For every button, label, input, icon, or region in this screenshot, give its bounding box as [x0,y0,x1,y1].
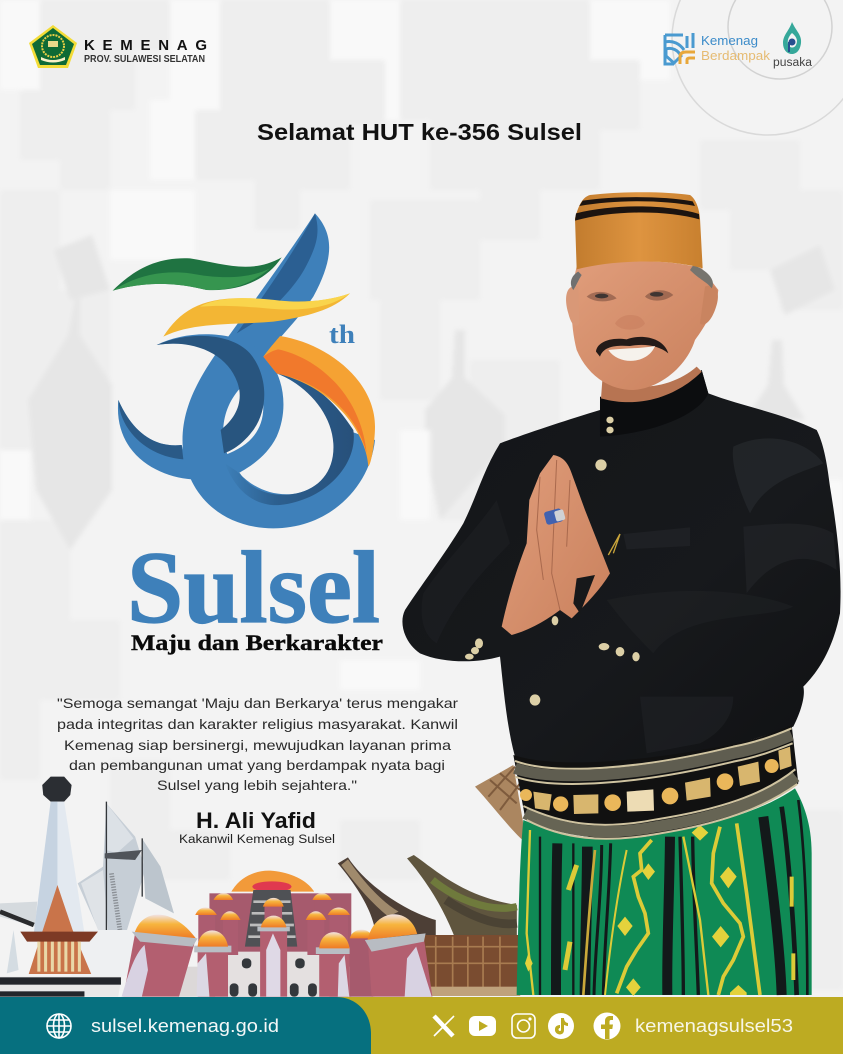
quote text block: Sulsel yang lebih sejahtera." [157,777,357,793]
text: Prov. Sulawesi Selatan: PROV. SULAWESI SELATAN [84,54,205,65]
tongkonan houses [338,855,520,996]
ship: phinisi sails [0,802,174,977]
icon: Kemenag pentagon emblem [29,25,77,68]
text: th: th [329,320,356,349]
landmarks illustration [0,777,520,997]
icon: pusaka droplet [783,22,801,54]
logo inner crescent [157,334,283,473]
title: Selamat HUT ke-356 Sulsel [257,119,582,145]
logo yellow blade [163,293,350,337]
text: speaker name: H. Ali Yafid [196,808,316,833]
person: man in traditional dress [402,192,841,996]
text: Maju dan Berkarakter: Maju dan Berkarakter [131,630,383,655]
quote text block: dan pembangunan umat yang berdampak nyata bagi [69,757,445,773]
quote text block: "Semoga semangat 'Maju dan Berkarya' terus mengakar [57,695,458,711]
text: Kemenag: Kemenag [701,33,758,48]
icon: Instagram [512,1014,535,1038]
text: Berdampak: Berdampak [701,48,771,63]
logo: Pusaka [773,22,813,69]
decorative circle top right large [672,0,843,135]
text: social handle: kemenagsulsel53 [635,1015,793,1036]
jacket buttons [465,417,640,706]
logo left crescent [118,400,192,479]
hands: namaste pose [502,455,610,635]
quote text block: pada integritas dan karakter religius masyarakat. Kanwil [57,716,458,732]
footer left teal panel [0,997,371,1054]
text: pusaka: pusaka [773,57,813,69]
sash: patterned belt [513,725,798,839]
mosque: 99 domes [122,871,432,997]
sarong: green songket [517,788,812,996]
icon: YouTube [469,1016,496,1036]
text: speaker role: Kakanwil Kemenag Sulsel [179,834,335,846]
icon: Facebook [594,1012,620,1040]
tongkonan roof behind person [475,765,527,843]
jacket: black with mandarin collar [402,370,841,764]
quote text block [57,695,458,793]
icon: globe [47,1014,71,1038]
neck [601,367,702,402]
logo: Kemenag Sulsel [29,25,207,68]
logo green blade [113,257,282,291]
head and face [566,261,718,390]
icon: Berdampak square mark [665,33,695,64]
icon: TikTok [548,1013,574,1039]
logo: Kemenag Berdampak [665,33,771,64]
text: KEMENAG: KEMENAG [84,37,207,54]
logo blue ribbon ring [183,213,375,528]
quote text block: Kemenag siap bersinergi, mewujudkan layanan prima [64,737,451,753]
logo: 356th anniversary emblem [113,213,375,528]
footer bar [0,997,843,1054]
text: website: sulsel.kemenag.go.id [91,1015,279,1036]
decorative circle top right small [728,0,832,79]
hat: songkok recca [575,192,703,269]
icon: X [434,1016,454,1036]
logo orange blade [263,336,375,467]
monument: Mandala tower [0,777,122,997]
text: Sulsel wordmark: Sulsel [127,531,380,645]
